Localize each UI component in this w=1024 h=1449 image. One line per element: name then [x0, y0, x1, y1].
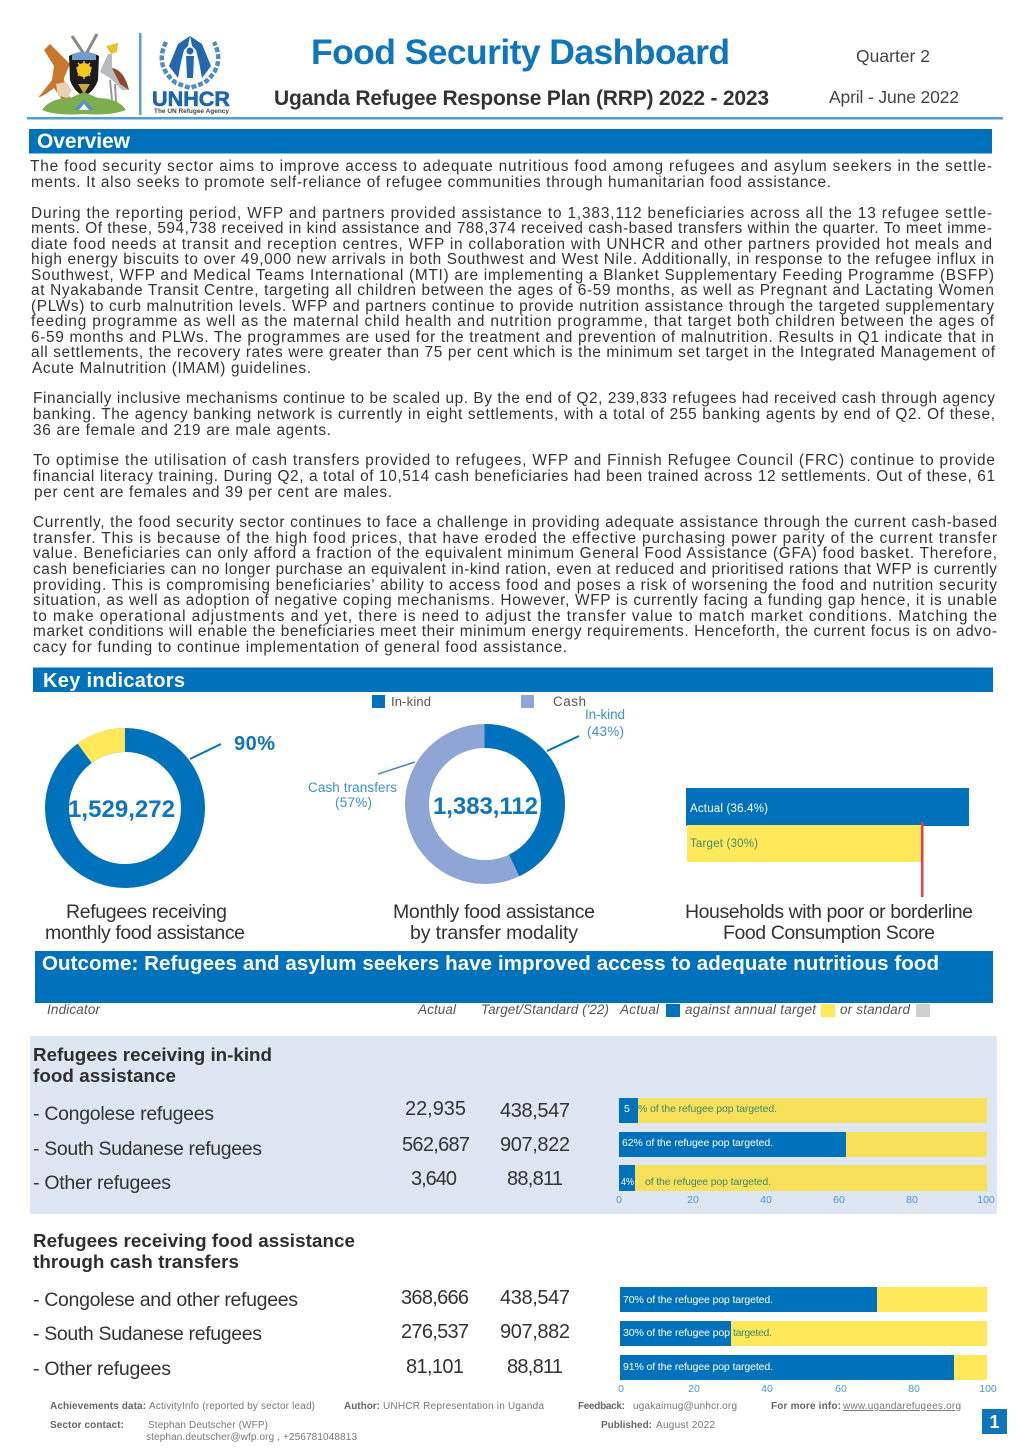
page number: 1 — [989, 1412, 1000, 1432]
page number — [982, 1409, 1007, 1434]
panel: in-kind food assistance — [30, 1036, 997, 1214]
panel heading: cash transfers — [33, 1230, 355, 1272]
footer: August 2022 — [656, 1420, 715, 1431]
row: Other refugees: 3,640 — [411, 1168, 457, 1190]
text block: overview paragraph 2: ments. Of these, 594,738 received in kind assistance and 788,374 received cash-based transfers within the quarter. To meet imme- — [31, 220, 992, 237]
footer: stephan.deutscher@wfp.org , +256781048813 — [146, 1432, 357, 1443]
caption: refugees receiving monthly food assistance — [45, 901, 245, 944]
text block: overview paragraph 5: situation, as well as adoption of negative coping mechanisms. However, WFP is currently facing a funding gap hence, it is unable — [33, 592, 997, 609]
row: Other refugees: 88,811 — [507, 1168, 563, 1190]
caption: monthly food assistance by modality — [393, 901, 595, 944]
text block: overview paragraph 5: transfer. This is because of the high food prices, that have eroded the effective purchasing power parity of the current transfer — [33, 530, 997, 547]
text block: overview paragraph 3: 36 are female and 219 are male agents. — [33, 422, 331, 439]
axis: cash chart: 40 — [761, 1383, 773, 1395]
text block: overview paragraph 5 — [33, 514, 997, 656]
legend: transfer modality: Cash — [553, 694, 586, 709]
row: Other refugees cash — [33, 1355, 987, 1380]
donut chart: transfer modality: (57%) — [335, 795, 372, 810]
donut chart: transfer modality: (43%) — [587, 724, 624, 739]
row: South Sudanese refugees cash — [33, 1321, 987, 1346]
bar chart: food consumption score — [686, 788, 969, 897]
row: South Sudanese refugees cash: - South Sudanese refugees — [33, 1323, 262, 1345]
caption: monthly food assistance by modality: Monthly food assistance — [393, 901, 595, 923]
text block: overview paragraph 3: Financially inclusive mechanisms continue to be scaled up. By the end of Q2, 239,833 refugees had received cash through agency — [33, 390, 995, 407]
text block: overview paragraph 2: Southwest, WFP and Medical Teams International (MTI) are implementing a Blanket Supplementary Feeding Programme (BSFP) — [31, 267, 994, 284]
donut chart: transfer modality: In-kind — [585, 707, 625, 722]
row: Congolese and other refugees: - Congolese and other refugees — [33, 1289, 298, 1311]
footer — [50, 1401, 961, 1443]
row: South Sudanese refugees: - South Sudanese refugees — [33, 1138, 262, 1160]
row: Other refugees cash: 88,811 — [507, 1356, 563, 1378]
legend: transfer modality: In-kind — [391, 694, 431, 709]
footer: Published: — [601, 1420, 652, 1431]
row: Congolese refugees: % of the refugee pop targeted. — [638, 1103, 777, 1115]
title: Food Security Dashboard — [311, 32, 730, 72]
row: South Sudanese refugees: 562,687 — [402, 1134, 470, 1156]
row: Congolese and other refugees: 438,547 — [500, 1287, 570, 1309]
footer: Author: — [344, 1401, 380, 1412]
text block: overview paragraph 2: diate food needs at transit and reception centres, WFP in collaboration with UNHCR and other partners provided hot meals and — [31, 236, 992, 253]
table header and legend: Indicator — [47, 1002, 100, 1017]
caption: food consumption score: Households with poor or borderline — [685, 901, 973, 923]
text block: overview paragraph 4 — [33, 452, 995, 501]
text block: overview paragraph 2: Acute Malnutrition (IMAM) guidelines. — [32, 360, 311, 377]
text block: overview paragraph 5: to make operational adjustments and yet, there is need to adjust the transfer value to match market conditions. Matching the — [33, 608, 997, 625]
panel heading: in-kind: food assistance — [33, 1065, 176, 1086]
legend: transfer modality — [372, 694, 586, 709]
panel heading: in-kind — [33, 1044, 272, 1086]
donut chart: transfer modality: 1,383,112 — [433, 793, 538, 820]
table header and legend: against annual target — [685, 1002, 817, 1017]
panel heading: in-kind: Refugees receiving in-kind — [33, 1044, 272, 1065]
row: Congolese and other refugees: 368,666 — [401, 1287, 469, 1309]
caption: refugees receiving monthly food assistance: monthly food assistance — [45, 922, 245, 944]
text block: overview paragraph 3: banking. The agency banking network is currently in eight settlements, with a total of 255 banking agents by end of Q2. Of these, — [33, 406, 995, 423]
footer: Stephan Deutscher (WFP) — [148, 1420, 268, 1431]
axis: in-kind chart: 20 — [687, 1194, 699, 1206]
row: Congolese refugees: 5 — [624, 1103, 630, 1115]
heading: Overview: Overview — [37, 130, 131, 153]
icon: Uganda coat of arms — [38, 34, 129, 114]
icon: UNHCR logo — [152, 36, 230, 115]
text block: overview paragraph 4: financial literacy training. During Q2, a total of 10,514 cash beneficiaries had been trained across 12 settlements. Out of these, 61 — [33, 468, 995, 485]
footer: Sector contact: — [50, 1420, 124, 1431]
row: South Sudanese refugees cash: 907,882 — [500, 1321, 570, 1343]
axis: in-kind chart: 40 — [760, 1194, 772, 1206]
heading: Key indicators: Key indicators — [43, 670, 185, 692]
axis: cash chart — [618, 1383, 997, 1395]
footer: UNHCR Representation in Uganda — [383, 1401, 544, 1412]
text block: overview paragraph 3 — [33, 390, 995, 439]
row: Congolese refugees: 22,935 — [405, 1098, 466, 1120]
text block: overview paragraph 5: market conditions will enable the beneficiaries meet their minimum energy requirements. Henceforth, the current focus is on advo- — [33, 623, 997, 640]
text block: overview paragraph 1: The food security sector aims to improve access to adequate nutritious food among refugees and asylum seekers in the settle- — [30, 158, 992, 175]
text block: overview paragraph 5: value. Beneficiaries can only afford a fraction of the equivalent minimum General Food Assistance (GFA) food basket. Therefore, — [33, 545, 997, 562]
row: Congolese refugees — [33, 1098, 987, 1125]
text block: overview paragraph 2 — [31, 205, 996, 377]
panel: cash transfers — [33, 1230, 997, 1395]
heading: Key indicators — [33, 668, 993, 692]
axis: cash chart: 100 — [979, 1383, 997, 1395]
row: Other refugees: - Other refugees — [33, 1172, 171, 1194]
panel heading: cash transfers: through cash transfers — [33, 1251, 239, 1272]
table header and legend: or standard — [840, 1002, 910, 1017]
donut chart: refugees receiving food assistance: 1,529,272 — [68, 796, 175, 823]
text block: overview paragraph 4: To optimise the utilisation of cash transfers provided to refugees, WFP and Finnish Refugee Council (FRC) continue to provide — [33, 452, 995, 469]
table header and legend: Actual — [417, 1002, 457, 1017]
text block: overview paragraph 1: ments. It also seeks to promote self-reliance of refugee communities through humanitarian food assistance. — [31, 174, 831, 191]
text block: overview paragraph 5: Currently, the food security sector continues to face a challenge in providing adequate assistance through the current cash-based — [33, 514, 997, 531]
text block: overview paragraph 5: providing. This is compromising beneficiaries' ability to access food and poses a risk of worsening the food and nutrition security — [33, 577, 997, 594]
row: Other refugees: 4% — [621, 1176, 634, 1188]
footer: Achievements data: — [50, 1401, 146, 1412]
row: Other refugees — [33, 1165, 987, 1194]
table header and legend — [47, 1002, 930, 1017]
donut chart: refugees receiving food assistance: 90% — [234, 733, 275, 755]
table header and legend: Actual — [619, 1002, 660, 1017]
row: South Sudanese refugees — [33, 1132, 987, 1160]
axis: cash chart: 60 — [835, 1383, 847, 1395]
icon: UNHCR logo: UNHCR — [152, 88, 230, 111]
caption: monthly food assistance by modality: by transfer modality — [410, 922, 578, 944]
text block: overview paragraph 2: feeding programme as well as the maternal child health and nutrition programme, that target both children between the ages of — [31, 313, 995, 330]
header rule — [27, 117, 1003, 120]
table header and legend: Target/Standard ('22) — [481, 1002, 609, 1017]
date range: April - June 2022 — [829, 87, 959, 107]
text block: overview paragraph 2: During the reporting period, WFP and partners provided assistance to 1,383,112 beneficiaries across all the 13 refugee settle- — [31, 205, 992, 222]
row: Congolese and other refugees: 70% of the refugee pop targeted. — [623, 1294, 773, 1306]
axis: in-kind chart: 0 — [616, 1194, 622, 1206]
row: Other refugees cash: 81,101 — [406, 1356, 464, 1378]
text block: overview paragraph 2: (PLWs) to curb malnutrition levels. WFP and partners continue to provide nutrition assistance through the targeted supplementary — [31, 298, 994, 315]
donut chart: refugees receiving food assistance — [30, 713, 275, 903]
footer: www.ugandarefugees.org — [842, 1401, 961, 1412]
footer: For more info: — [771, 1401, 841, 1412]
row: Congolese and other refugees — [33, 1287, 987, 1312]
text block: overview paragraph 1 — [30, 158, 992, 191]
bar chart: food consumption score: Actual (36.4%) — [690, 803, 768, 815]
text block: overview paragraph 5: cacy for funding to continue implementation of general food assistance. — [33, 639, 567, 656]
bar chart: food consumption score: Target (30%) — [690, 838, 758, 850]
row: Other refugees cash: - Other refugees — [33, 1358, 171, 1380]
row: South Sudanese refugees: 907,822 — [500, 1134, 570, 1156]
caption: food consumption score: Food Consumption Score — [723, 922, 935, 944]
heading: Outcome: Outcome: Refugees and asylum seekers have improved access to adequate nutritious food — [42, 952, 939, 975]
text block: overview paragraph 5: cash beneficiaries can no longer purchase an equivalent in-kind ration, even at reduced and prioritised rations that WFP is currently — [33, 561, 997, 578]
panel heading: cash transfers: Refugees receiving food assistance — [33, 1230, 355, 1251]
text block: overview paragraph 2: high energy biscuits to over 49,000 new arrivals in both Southwest and West Nile. Additionally, in response to the refugee influx in — [31, 251, 994, 268]
row: South Sudanese refugees: 62% of the refugee pop targeted. — [622, 1137, 773, 1149]
text block: overview paragraph 2: all settlements, the recovery rates were greater than 75 per cent which is the minimum set target in the Integrated Management of — [31, 344, 996, 361]
axis: cash chart: 0 — [618, 1383, 624, 1395]
footer: ugakaimug@unhcr.org — [633, 1401, 737, 1412]
axis: in-kind chart: 80 — [906, 1194, 918, 1206]
row: Congolese refugees: - Congolese refugees — [33, 1103, 214, 1125]
axis: cash chart: 80 — [908, 1383, 920, 1395]
row: South Sudanese refugees cash: targeted. — [733, 1327, 772, 1339]
caption: refugees receiving monthly food assistance: Refugees receiving — [66, 901, 227, 923]
heading: Overview — [29, 129, 992, 154]
heading: Outcome — [35, 951, 993, 1003]
text block: overview paragraph 2: at Nyakabande Transit Centre, targeting all children between the ages of 6-59 months, as well as Pregnant and Lactating Women — [31, 282, 994, 299]
row: South Sudanese refugees cash: 276,537 — [401, 1321, 469, 1343]
icon: UNHCR logo: The UN Refugee Agency — [154, 109, 230, 115]
subtitle: Uganda Refugee Response Plan (RRP) 2022 - 2023 — [274, 87, 769, 110]
axis: cash chart: 20 — [688, 1383, 700, 1395]
axis: in-kind chart: 60 — [833, 1194, 845, 1206]
axis: in-kind chart — [616, 1194, 995, 1206]
donut chart: transfer modality — [308, 707, 625, 872]
row: South Sudanese refugees cash: 30% of the refugee pop — [623, 1327, 730, 1339]
text block: overview paragraph 4: per cent are females and 39 per cent are males. — [34, 484, 392, 501]
footer: ActivityInfo (reported by sector lead) — [149, 1401, 315, 1412]
row: Other refugees: of the refugee pop targeted. — [645, 1176, 771, 1188]
caption: food consumption score — [685, 901, 973, 944]
axis: in-kind chart: 100 — [977, 1194, 995, 1206]
row: Other refugees cash: 91% of the refugee pop targeted. — [623, 1361, 773, 1373]
donut chart: transfer modality: Cash transfers — [308, 780, 397, 795]
row: Congolese refugees: 438,547 — [500, 1100, 570, 1122]
text block: overview paragraph 2: 6-59 months and PLWs. The programmes are used for the treatment and prevention of malnutrition. Results in Q1 indicate that in — [31, 329, 994, 346]
logo divider — [139, 33, 142, 115]
footer: Feedback: — [578, 1401, 625, 1412]
quarter label: Quarter 2 — [856, 46, 930, 66]
